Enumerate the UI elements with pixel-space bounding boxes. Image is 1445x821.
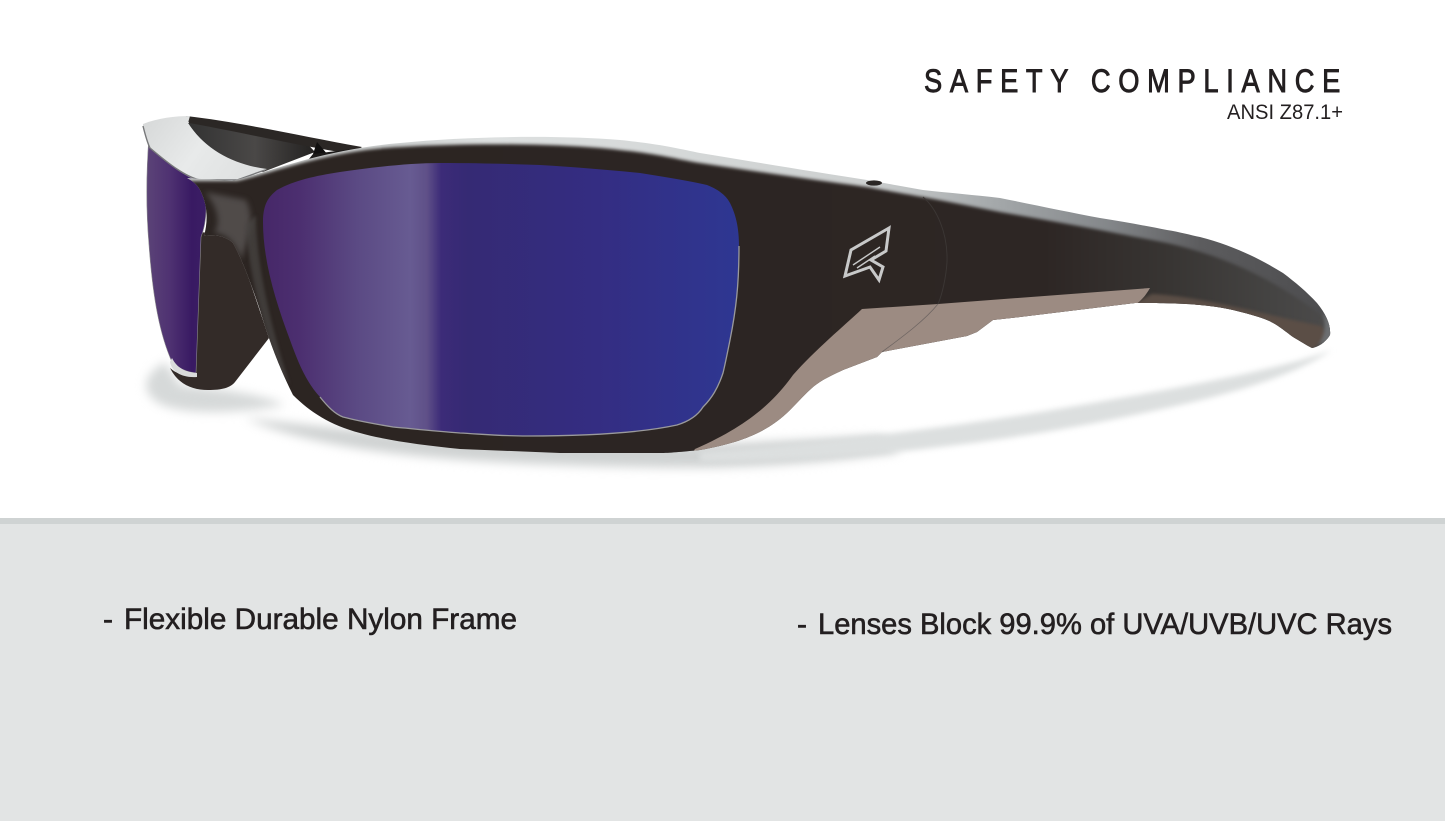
lens bevel sheen xyxy=(248,217,288,380)
nose pad xyxy=(170,232,269,390)
lower far-side rim highlight xyxy=(170,358,197,377)
main lens xyxy=(263,163,739,436)
gray tip xyxy=(1318,314,1330,344)
feature: nylon frame: - xyxy=(103,603,113,636)
far-side lens xyxy=(147,136,206,373)
brown underside of temple tip xyxy=(1130,294,1328,350)
heading: safety compliance: SAFETY COMPLIANCE xyxy=(924,63,1348,99)
lower hinge seam xyxy=(882,304,938,352)
lens lower rim highlight xyxy=(320,246,739,436)
tan underside insert xyxy=(690,288,1150,456)
far-side brow and rear band xyxy=(186,116,362,172)
logo emblem xyxy=(845,228,889,280)
feature: nylon frame: Flexible Durable Nylon Frame xyxy=(124,603,517,636)
dark frame body xyxy=(170,144,1340,470)
feature: UV protection: Lenses Block 99.9% of UVA/UVB/UVC Rays xyxy=(818,608,1392,641)
hinge seam xyxy=(923,197,947,304)
hinge pin xyxy=(866,180,882,186)
cast shadow xyxy=(146,350,1332,468)
feature: UV protection: - xyxy=(797,608,807,641)
subheading: ANSI standard: ANSI Z87.1+ xyxy=(1227,101,1343,124)
illustration: wraparound safety glasses xyxy=(143,116,1340,470)
silver brow lower edge xyxy=(143,126,265,180)
bridge sheen xyxy=(205,192,251,260)
panel: feature strip xyxy=(0,518,1445,821)
frame front and temple xyxy=(170,130,1340,470)
silver brow xyxy=(143,116,267,181)
